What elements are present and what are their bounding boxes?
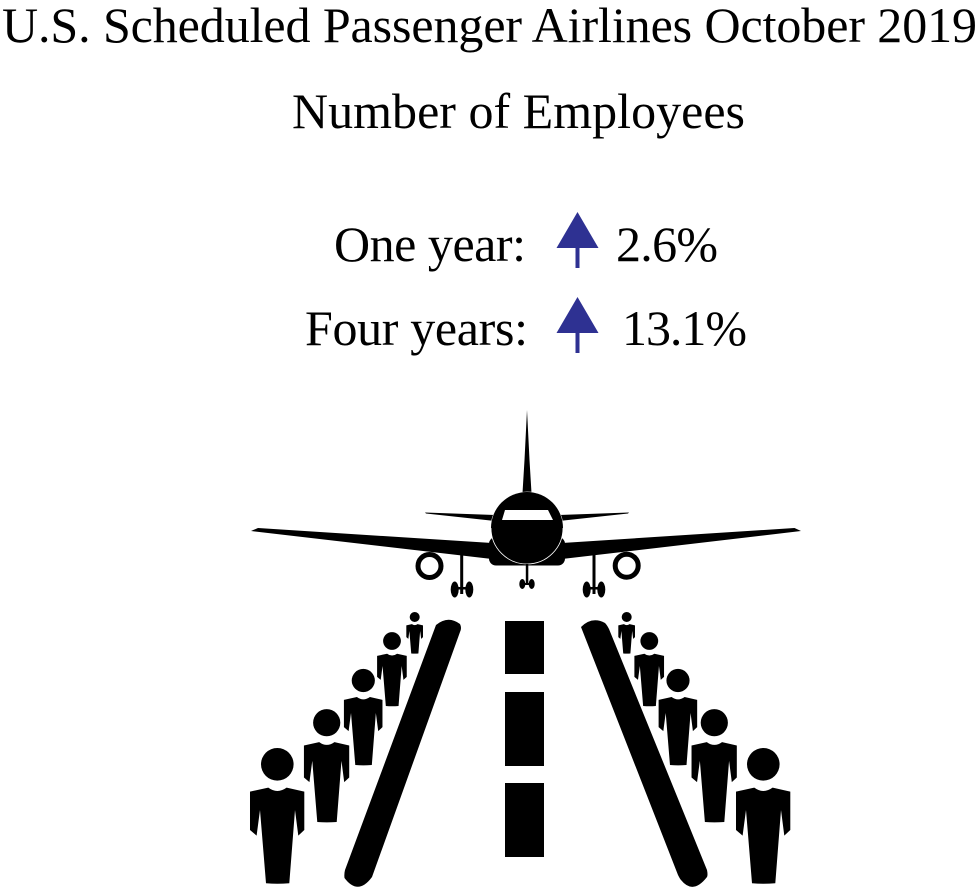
people right line [618, 612, 790, 884]
four years value: 13.1% [622, 300, 747, 356]
runway centre dashes [505, 621, 544, 857]
runway left edge [344, 620, 461, 887]
one year label: One year: [334, 216, 526, 272]
one year value: 2.6% [616, 216, 718, 272]
subtitle: Number of Employees [292, 83, 745, 139]
icon: airplane front view [251, 410, 801, 598]
icon: up arrow four years [556, 297, 598, 353]
runway right edge [581, 620, 708, 887]
four years label: Four years: [305, 300, 528, 356]
people left line [250, 612, 423, 884]
icon: up arrow one year [556, 212, 598, 268]
